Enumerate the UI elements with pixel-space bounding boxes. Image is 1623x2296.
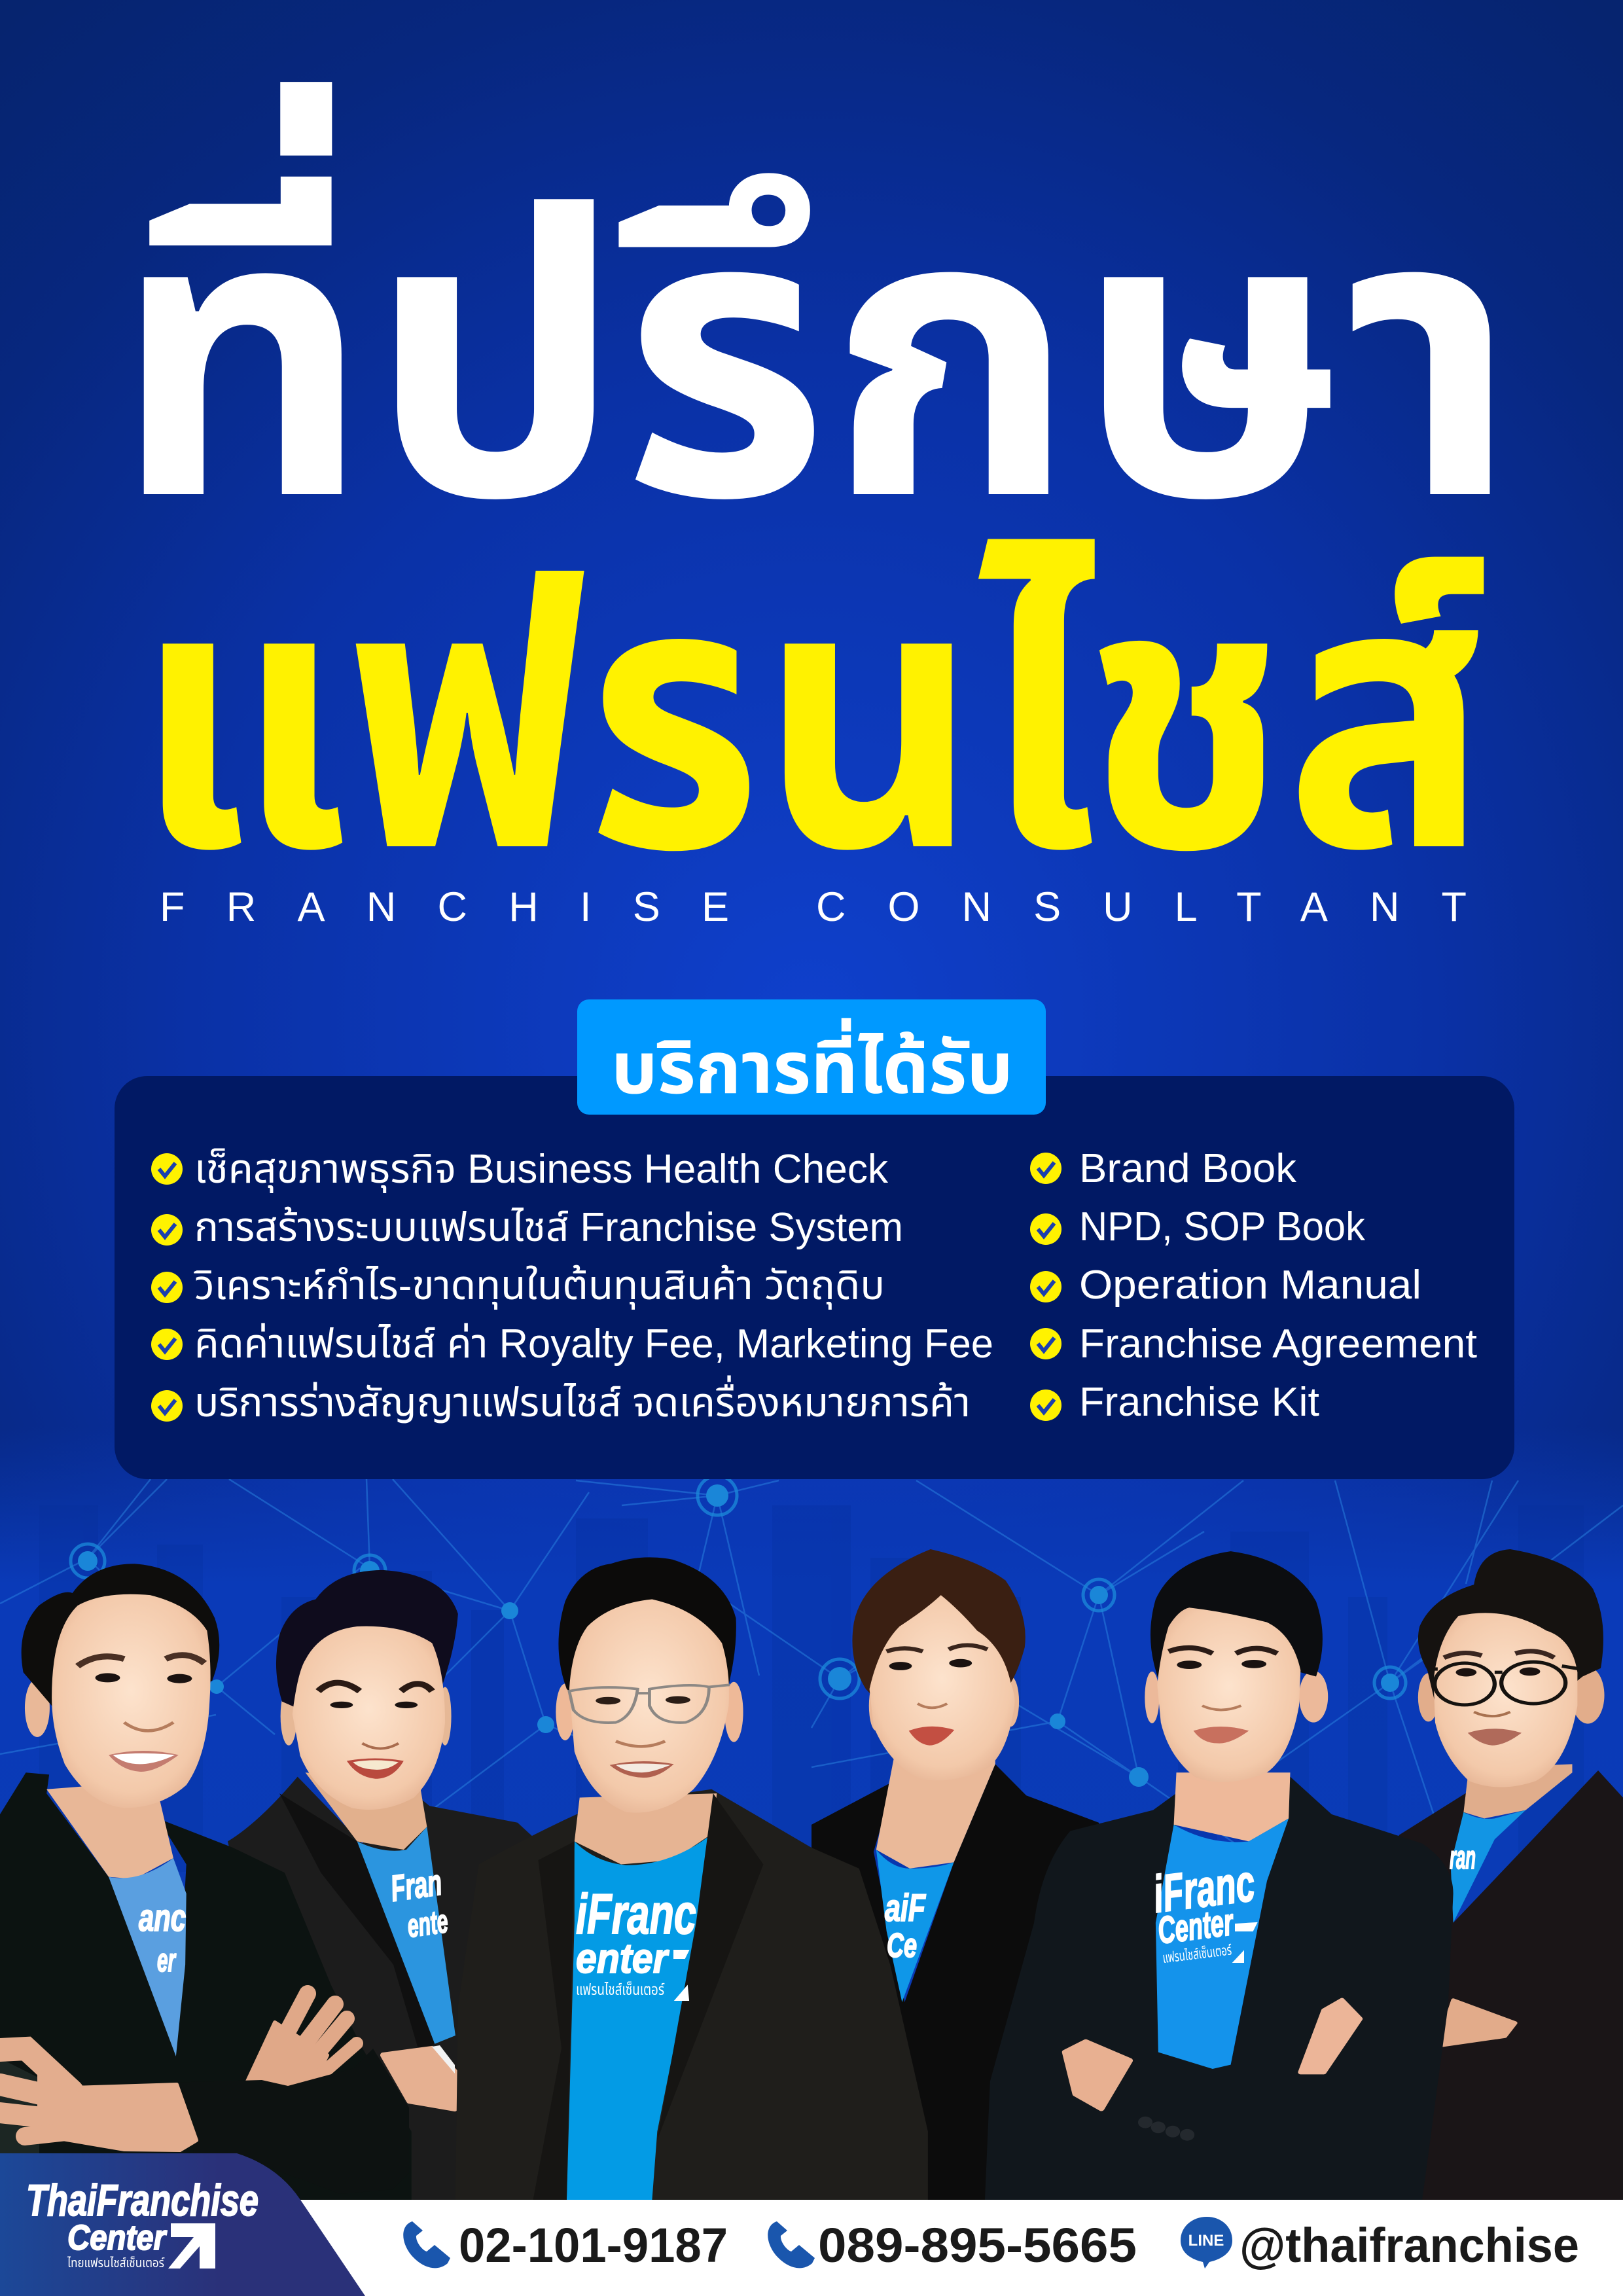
icon: phone (403, 2221, 450, 2268)
contact: phone 2: 089-895-5665 (818, 2218, 1137, 2272)
shirt lettering: Center (1156, 1901, 1237, 1952)
shirt lettering: iFranc (1150, 1854, 1258, 1924)
left arm sleeve (167, 2049, 409, 2194)
subtitle: CONSULTANT (816, 884, 1467, 930)
item: health check: เช็คสุขภาพธุรกิจ Business Health Check (194, 1147, 889, 1193)
logo arrow (168, 2223, 215, 2269)
shirt lettering: Fran (388, 1861, 444, 1909)
services list right (1030, 1146, 1477, 1425)
person 6 (1399, 1549, 1623, 2200)
item: franchise agreement: Franchise Agreement (1079, 1321, 1477, 1367)
shirt lettering: aiF (885, 1887, 926, 1929)
person 2 (228, 1570, 538, 2200)
panel: services (115, 999, 1514, 1479)
logo panel (0, 2153, 365, 2296)
title: แฟรนไชส์: แฟรนไชส์ (134, 512, 1488, 925)
right hand fingers (247, 1994, 357, 2087)
shirt lettering: Ce (887, 1927, 917, 1965)
person 3 (455, 1557, 928, 2200)
left hand (0, 2049, 196, 2153)
footer bar (0, 2200, 1623, 2296)
logo wordmark: ThaiFranchise (26, 2176, 259, 2225)
subtitle: FRANCHISE (160, 884, 729, 930)
item: royalty fee: คิดค่าแฟรนไชส์ ค่า Royalty Fee, Marketing Fee (194, 1321, 993, 1367)
subtitle (160, 884, 1467, 930)
icon: line bubble: LINE (1188, 2232, 1224, 2250)
person 1 (0, 1564, 412, 2200)
logo wordmark (26, 2176, 259, 2270)
shirt lettering: er (157, 1942, 177, 1979)
logo wordmark: ไทยแฟรนไชส์เซ็นเตอร์ (67, 2256, 165, 2270)
shirt lettering: แฟรนไชส์เซ็นเตอร์ (576, 1981, 665, 1999)
item: NPD SOP: NPD, SOP Book (1079, 1204, 1366, 1249)
shirt lettering: iFranc (576, 1883, 696, 1946)
shirt lettering: enter (576, 1935, 669, 1982)
shirt lettering (139, 1839, 1476, 2000)
shirt lettering: แฟรนไชส์เซ็นเตอร์ (1162, 1941, 1233, 1966)
shirt lettering: ente (405, 1903, 450, 1945)
item: profit analysis: วิเคราะห์กำไร-ขาดทุนในต้นทุนสินค้า วัตถุดิบ (194, 1263, 885, 1310)
item: brand book: Brand Book (1079, 1146, 1297, 1191)
logo wordmark: Center (67, 2218, 168, 2257)
badge: services heading (577, 999, 1046, 1115)
services list left (151, 1147, 993, 1426)
icon: phone (768, 2221, 815, 2268)
item: operation manual: Operation Manual (1079, 1263, 1421, 1308)
icon: line bubble (1181, 2217, 1232, 2269)
person 4 (812, 1549, 1122, 2200)
contact: phone 1: 02-101-9187 (459, 2218, 728, 2272)
item: franchise kit: Franchise Kit (1079, 1380, 1319, 1425)
person 5 (985, 1551, 1454, 2200)
title: ที่ปรึกษา: ที่ปรึกษา (113, 78, 1518, 579)
contact: line: @thaifranchise (1240, 2218, 1579, 2272)
badge: services heading: บริการที่ได้รับ (611, 1018, 1013, 1109)
shirt lettering: ran (1450, 1839, 1476, 1876)
city and network backdrop (0, 1427, 1623, 2212)
item: franchise system: การสร้างระบบแฟรนไชส์ Franchise System (194, 1205, 903, 1250)
shirt lettering: anc (139, 1897, 186, 1939)
item: contract: บริการร่างสัญญาแฟรนไชส์ จดเครื่องหมายการค้า (194, 1375, 971, 1426)
